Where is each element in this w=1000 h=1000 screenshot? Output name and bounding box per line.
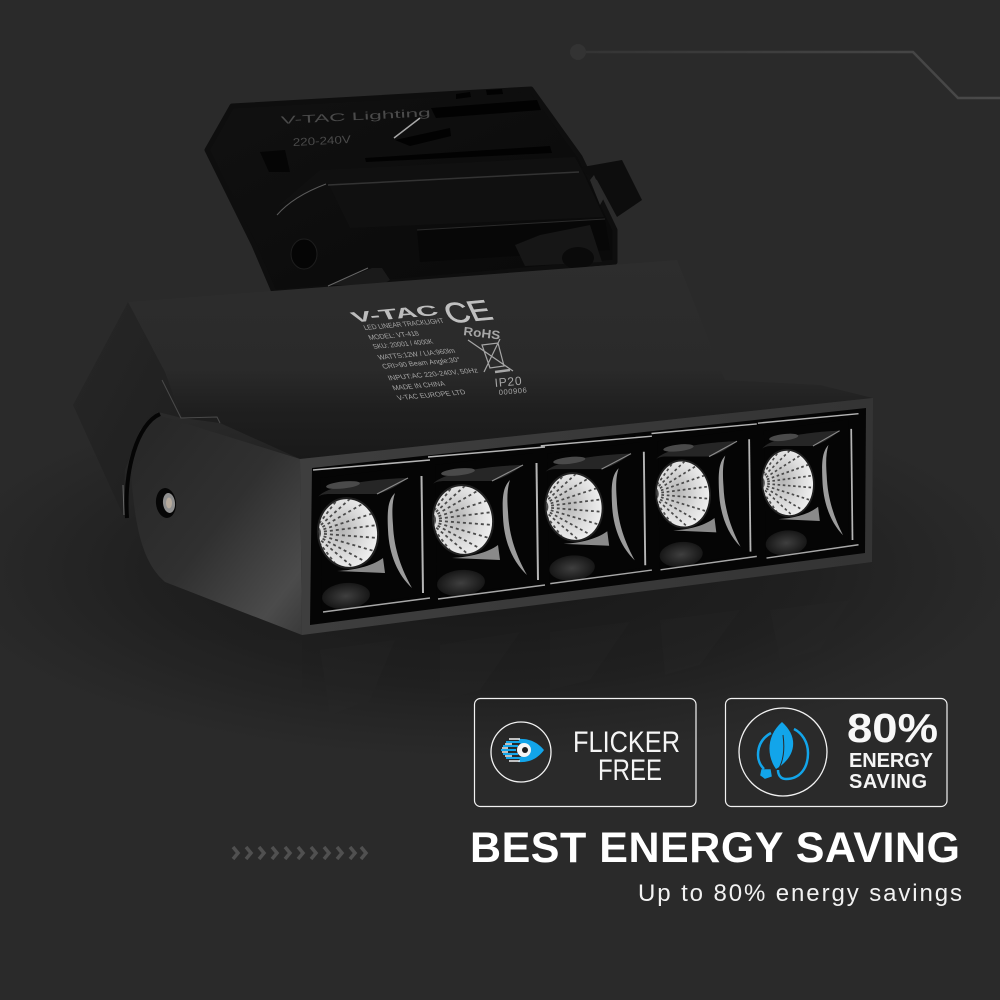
side screw [154, 487, 178, 519]
big percentage: 80% [847, 705, 938, 751]
left bracket wedge [73, 302, 182, 515]
specification lines: LED LINEAR TRACKLIGHT [362, 316, 446, 332]
specification lines: INPUT:AC 220-240V, 50Hz [386, 366, 480, 382]
front housing frame [300, 398, 873, 635]
side panel with rounded end [131, 415, 302, 635]
badge: flicker free [474, 698, 696, 806]
adapter embossed text: V-TAC Lighting [281, 107, 431, 127]
icon: leaf with plug cord [758, 722, 808, 779]
badge caption [849, 750, 934, 793]
LED module 1 [312, 460, 430, 612]
crossed-out bin icon [468, 339, 513, 372]
badge caption: ENERGY [849, 750, 934, 772]
badge caption: SAVING [849, 771, 927, 793]
black light opening [310, 408, 866, 625]
specification lines: WATTS:12W / LIA:960lm [376, 346, 457, 362]
mounting plate top surface [128, 260, 873, 459]
floor reflection of the product [100, 600, 850, 720]
badge text [573, 726, 680, 787]
subheading: Up to 80% energy savings [638, 880, 962, 907]
decorative circuit line [570, 44, 1000, 98]
specification lines: MADE IN CHINA [391, 379, 446, 392]
specification lines: V-TAC EUROPE LTD [396, 388, 468, 402]
badge: 80% energy saving [726, 698, 947, 806]
badge text: FLICKER [573, 726, 680, 759]
specification lines: SKU: 20001 / 4000K [371, 337, 435, 351]
adapter upper slots [365, 89, 552, 162]
adapter clip [577, 160, 642, 217]
V-TAC logo: V-TAC [349, 303, 442, 326]
CE mark: CE [438, 294, 498, 330]
specification lines: CRI>90 Beam Angle:30° [380, 355, 462, 371]
heading: BEST ENERGY SAVING [470, 824, 960, 872]
specification lines: MODEL: VT-418 [367, 329, 420, 342]
LED module 5 [757, 414, 859, 558]
LED module 3 [540, 436, 652, 584]
adapter embossed text: 220-240V [293, 134, 352, 149]
RoHS mark: RoHS [463, 324, 501, 342]
LED module 4 [651, 424, 757, 570]
chevron row [233, 847, 366, 859]
specification lines [362, 316, 489, 402]
track adapter connector [207, 89, 642, 292]
icon: eye with speed lines [501, 739, 544, 762]
adapter embossed text [281, 107, 431, 149]
LED module 2 [427, 447, 545, 599]
product: V-TAC linear track light [73, 89, 873, 635]
adapter front bar [277, 157, 604, 228]
IP20 rating: IP20 [494, 374, 522, 390]
adapter knob [515, 225, 602, 266]
batch code: 000906 [498, 386, 527, 397]
adapter screw hole [291, 239, 317, 269]
printed product label [346, 294, 529, 403]
badge text: FREE [598, 754, 662, 787]
